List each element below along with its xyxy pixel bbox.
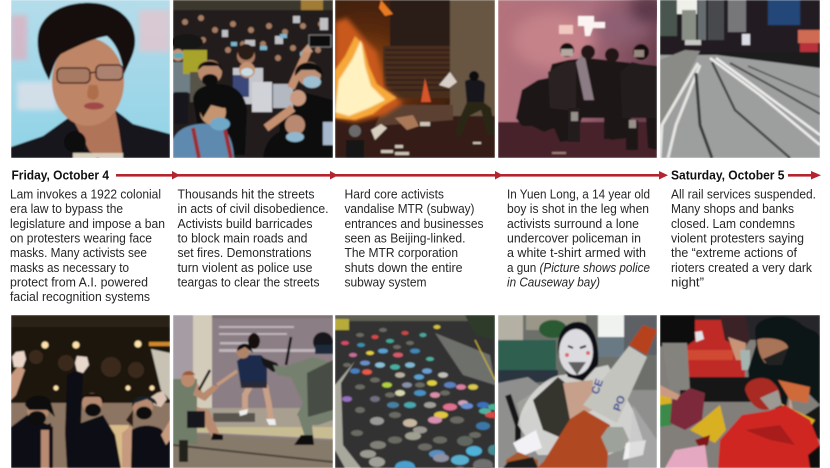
text: column 5 [671, 188, 816, 290]
photo: masked protesters raising hands [11, 315, 170, 468]
text: column 4: a white t-shirt armed with [507, 246, 646, 260]
text: column 4: boy is shot in the leg when [507, 202, 649, 216]
text: column 3: subway system [344, 276, 426, 290]
text: column 3: Hard core activists [344, 188, 444, 202]
text: column 3: entrances and businesses [344, 217, 484, 231]
text: column 1: Lam invokes a 1922 colonial [10, 188, 161, 202]
photo: protester in Guy Fawkes mask with traffic cone: CE [590, 378, 606, 396]
text: column 5: rioters created a very dark [671, 261, 813, 275]
photo: Carrie Lam at podium [11, 0, 170, 158]
text: column 3: The MTR corporation [344, 246, 458, 260]
text: column 2: teargas to clear the streets [178, 276, 320, 290]
photo: fire at MTR entrance [335, 0, 495, 158]
text: column 4: activists surround a lone [507, 217, 639, 231]
photo: empty street with tram tracks [660, 0, 820, 158]
photo: masked crowd with raised hands [173, 0, 333, 158]
timeline heading: Saturday, October 5: Saturday, October 5 [671, 168, 784, 182]
timeline arrows [116, 171, 821, 180]
text: column 4: In Yuen Long, a 14 year old [507, 188, 650, 202]
photo: police chasing protesters [173, 315, 333, 468]
text: column 1: masks as necessary to [10, 261, 129, 275]
text: column 2: in acts of civil disobedience. [178, 202, 328, 216]
text: column 2: Activists build barricades [178, 217, 312, 231]
photo: umbrella march [335, 315, 495, 468]
text: column 2: set fires. Demonstrations [178, 246, 312, 260]
text: column 2: Thousands hit the streets [178, 188, 314, 202]
timeline heading: Friday, October 4: Friday, October 4 [12, 168, 110, 182]
text: column 4: in Causeway bay) [507, 276, 600, 290]
text: column 1: era law to bypass the [10, 202, 123, 216]
text: column 1: masks. Many activists see [10, 246, 147, 260]
text: column 2: to block main roads and [178, 232, 308, 246]
text: column 3: seen as Beijing-linked. [344, 232, 466, 246]
photo: protester in Guy Fawkes mask with traffic cone: PO [612, 394, 628, 413]
text: column 3: shuts down the entire [344, 261, 462, 275]
text: column 5: Many shops and banks [671, 202, 794, 216]
photo: protester in Guy Fawkes mask with traffic cone [498, 315, 657, 468]
text: column 3 [344, 188, 484, 290]
text: column 1: legislature and impose a ban [10, 217, 165, 231]
text: column 5: violent protesters saying [671, 232, 804, 246]
text: column 1: protect from A.I. powered [10, 276, 148, 290]
text: column 1: on protesters wearing face [10, 232, 152, 246]
photo: injured man in red on the ground [660, 315, 820, 468]
text: column 1 [10, 188, 165, 304]
text: column 1: facial recognition systems [10, 290, 150, 304]
text: column 5: All rail services suspended. [671, 188, 816, 202]
text: column 2: turn violent as police use [178, 261, 312, 275]
text: column 5: night” [671, 276, 704, 290]
text: column 5: the “extreme actions of [671, 246, 797, 260]
text: column 4: a gun (Picture shows police [507, 261, 650, 275]
text: column 2 [178, 188, 328, 290]
text: column 5: closed. Lam condemns [671, 217, 795, 231]
text: column 3: vandalise MTR (subway) [344, 202, 474, 216]
photo: riot police in tear gas [498, 0, 657, 158]
text: column 4 [507, 188, 650, 290]
text: column 4: undercover policeman in [507, 232, 641, 246]
